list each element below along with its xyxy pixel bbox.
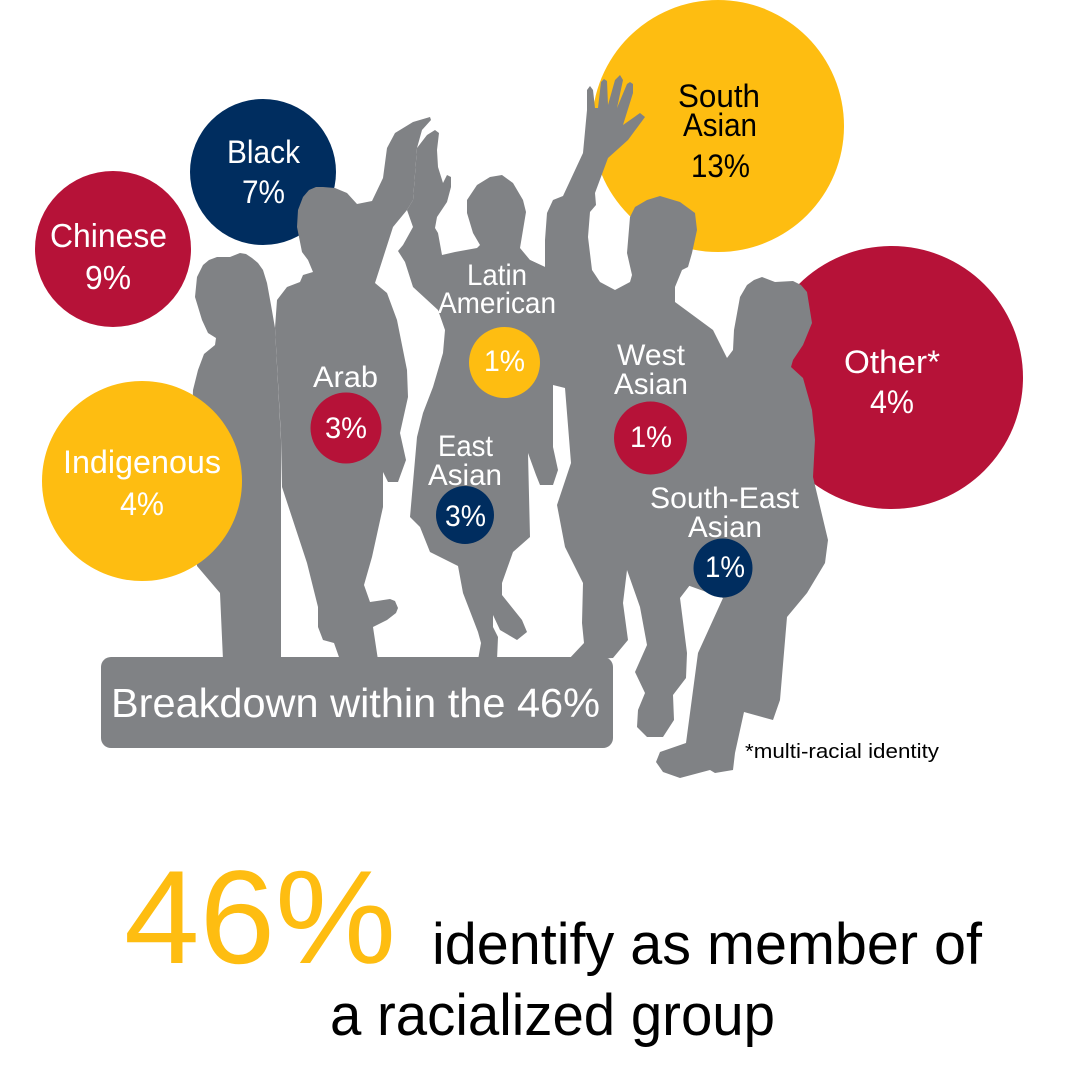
- label: Arab 3%: Arab: [313, 361, 378, 394]
- circle: Latin American 1%: [469, 327, 540, 398]
- label: Other 4%: 4%: [870, 384, 914, 420]
- headline line 1: identify as member of: [432, 912, 983, 977]
- label: West Asian 1%: Asian: [614, 368, 688, 401]
- circle: Arab 3%: [310, 392, 382, 464]
- label: East Asian 3%: Asian: [428, 459, 502, 492]
- person 3: centre, raised hand and skirt: [398, 130, 565, 660]
- label: Indigenous 4%: Indigenous: [63, 444, 221, 480]
- label: South-East Asian 1%: Asian: [688, 511, 762, 544]
- label: East Asian 3%: 3%: [445, 500, 486, 533]
- label: Latin American 1%: 1%: [484, 345, 525, 378]
- label: Latin American 1%: American: [438, 287, 556, 320]
- label: West Asian 1%: West: [617, 339, 686, 372]
- circle: East Asian 3%: [436, 486, 494, 544]
- label: Indigenous 4%: 4%: [120, 486, 164, 522]
- label: South-East Asian 1%: [650, 482, 800, 584]
- label: South-East Asian 1%: 1%: [705, 551, 745, 584]
- circle: South-East Asian 1%: [694, 538, 752, 598]
- person 2: raised arm, centre left: [275, 117, 431, 660]
- label: Chinese 9%: 9%: [85, 259, 131, 296]
- label: Chinese 9%: [50, 217, 167, 296]
- label: Chinese 9%: Chinese: [50, 217, 167, 254]
- label: Black 7%: Black: [227, 134, 301, 170]
- person 4: raised hand, curly hair: [530, 75, 740, 737]
- label: Black 7%: [227, 134, 301, 210]
- label: South Asian 13%: Asian: [683, 107, 757, 143]
- circle: Indigenous 4%: [42, 381, 242, 581]
- label: Indigenous 4%: [63, 444, 221, 522]
- footnote: *multi-racial identity: [745, 740, 940, 763]
- circle: West Asian 1%: [614, 402, 687, 474]
- person 5: front right, walking: [656, 277, 828, 778]
- label: East Asian 3%: [428, 430, 502, 533]
- circle: Black 7%: [190, 99, 336, 245]
- person 1: girl at left: [190, 253, 281, 660]
- headline line 2: a racialized group: [330, 983, 775, 1048]
- label: South Asian 13%: 13%: [691, 148, 750, 184]
- label: East Asian 3%: East: [438, 430, 494, 463]
- big stat: 46%: 46%: [124, 844, 396, 992]
- banner: breakdown within the 46%: Breakdown within the 46%: [111, 680, 600, 726]
- label: Latin American 1%: [438, 259, 556, 378]
- label: South Asian 13%: [678, 78, 760, 184]
- banner: breakdown within the 46%: [101, 657, 613, 748]
- circle: Chinese 9%: [35, 171, 191, 327]
- circle: South Asian 13%: [592, 0, 844, 252]
- label: Other 4%: Other*: [844, 344, 940, 380]
- label: South Asian 13%: South: [678, 78, 760, 114]
- silhouettes of five people: [190, 75, 828, 778]
- label: Black 7%: 7%: [242, 174, 285, 210]
- label: West Asian 1%: [614, 339, 688, 454]
- label: West Asian 1%: 1%: [630, 421, 672, 454]
- label: Other 4%: [844, 344, 940, 420]
- label: Arab 3%: [313, 361, 378, 445]
- label: Latin American 1%: Latin: [467, 259, 527, 292]
- label: South-East Asian 1%: South-East: [650, 482, 800, 515]
- label: Arab 3%: 3%: [325, 412, 367, 445]
- circle: Other 4%: [760, 246, 1023, 509]
